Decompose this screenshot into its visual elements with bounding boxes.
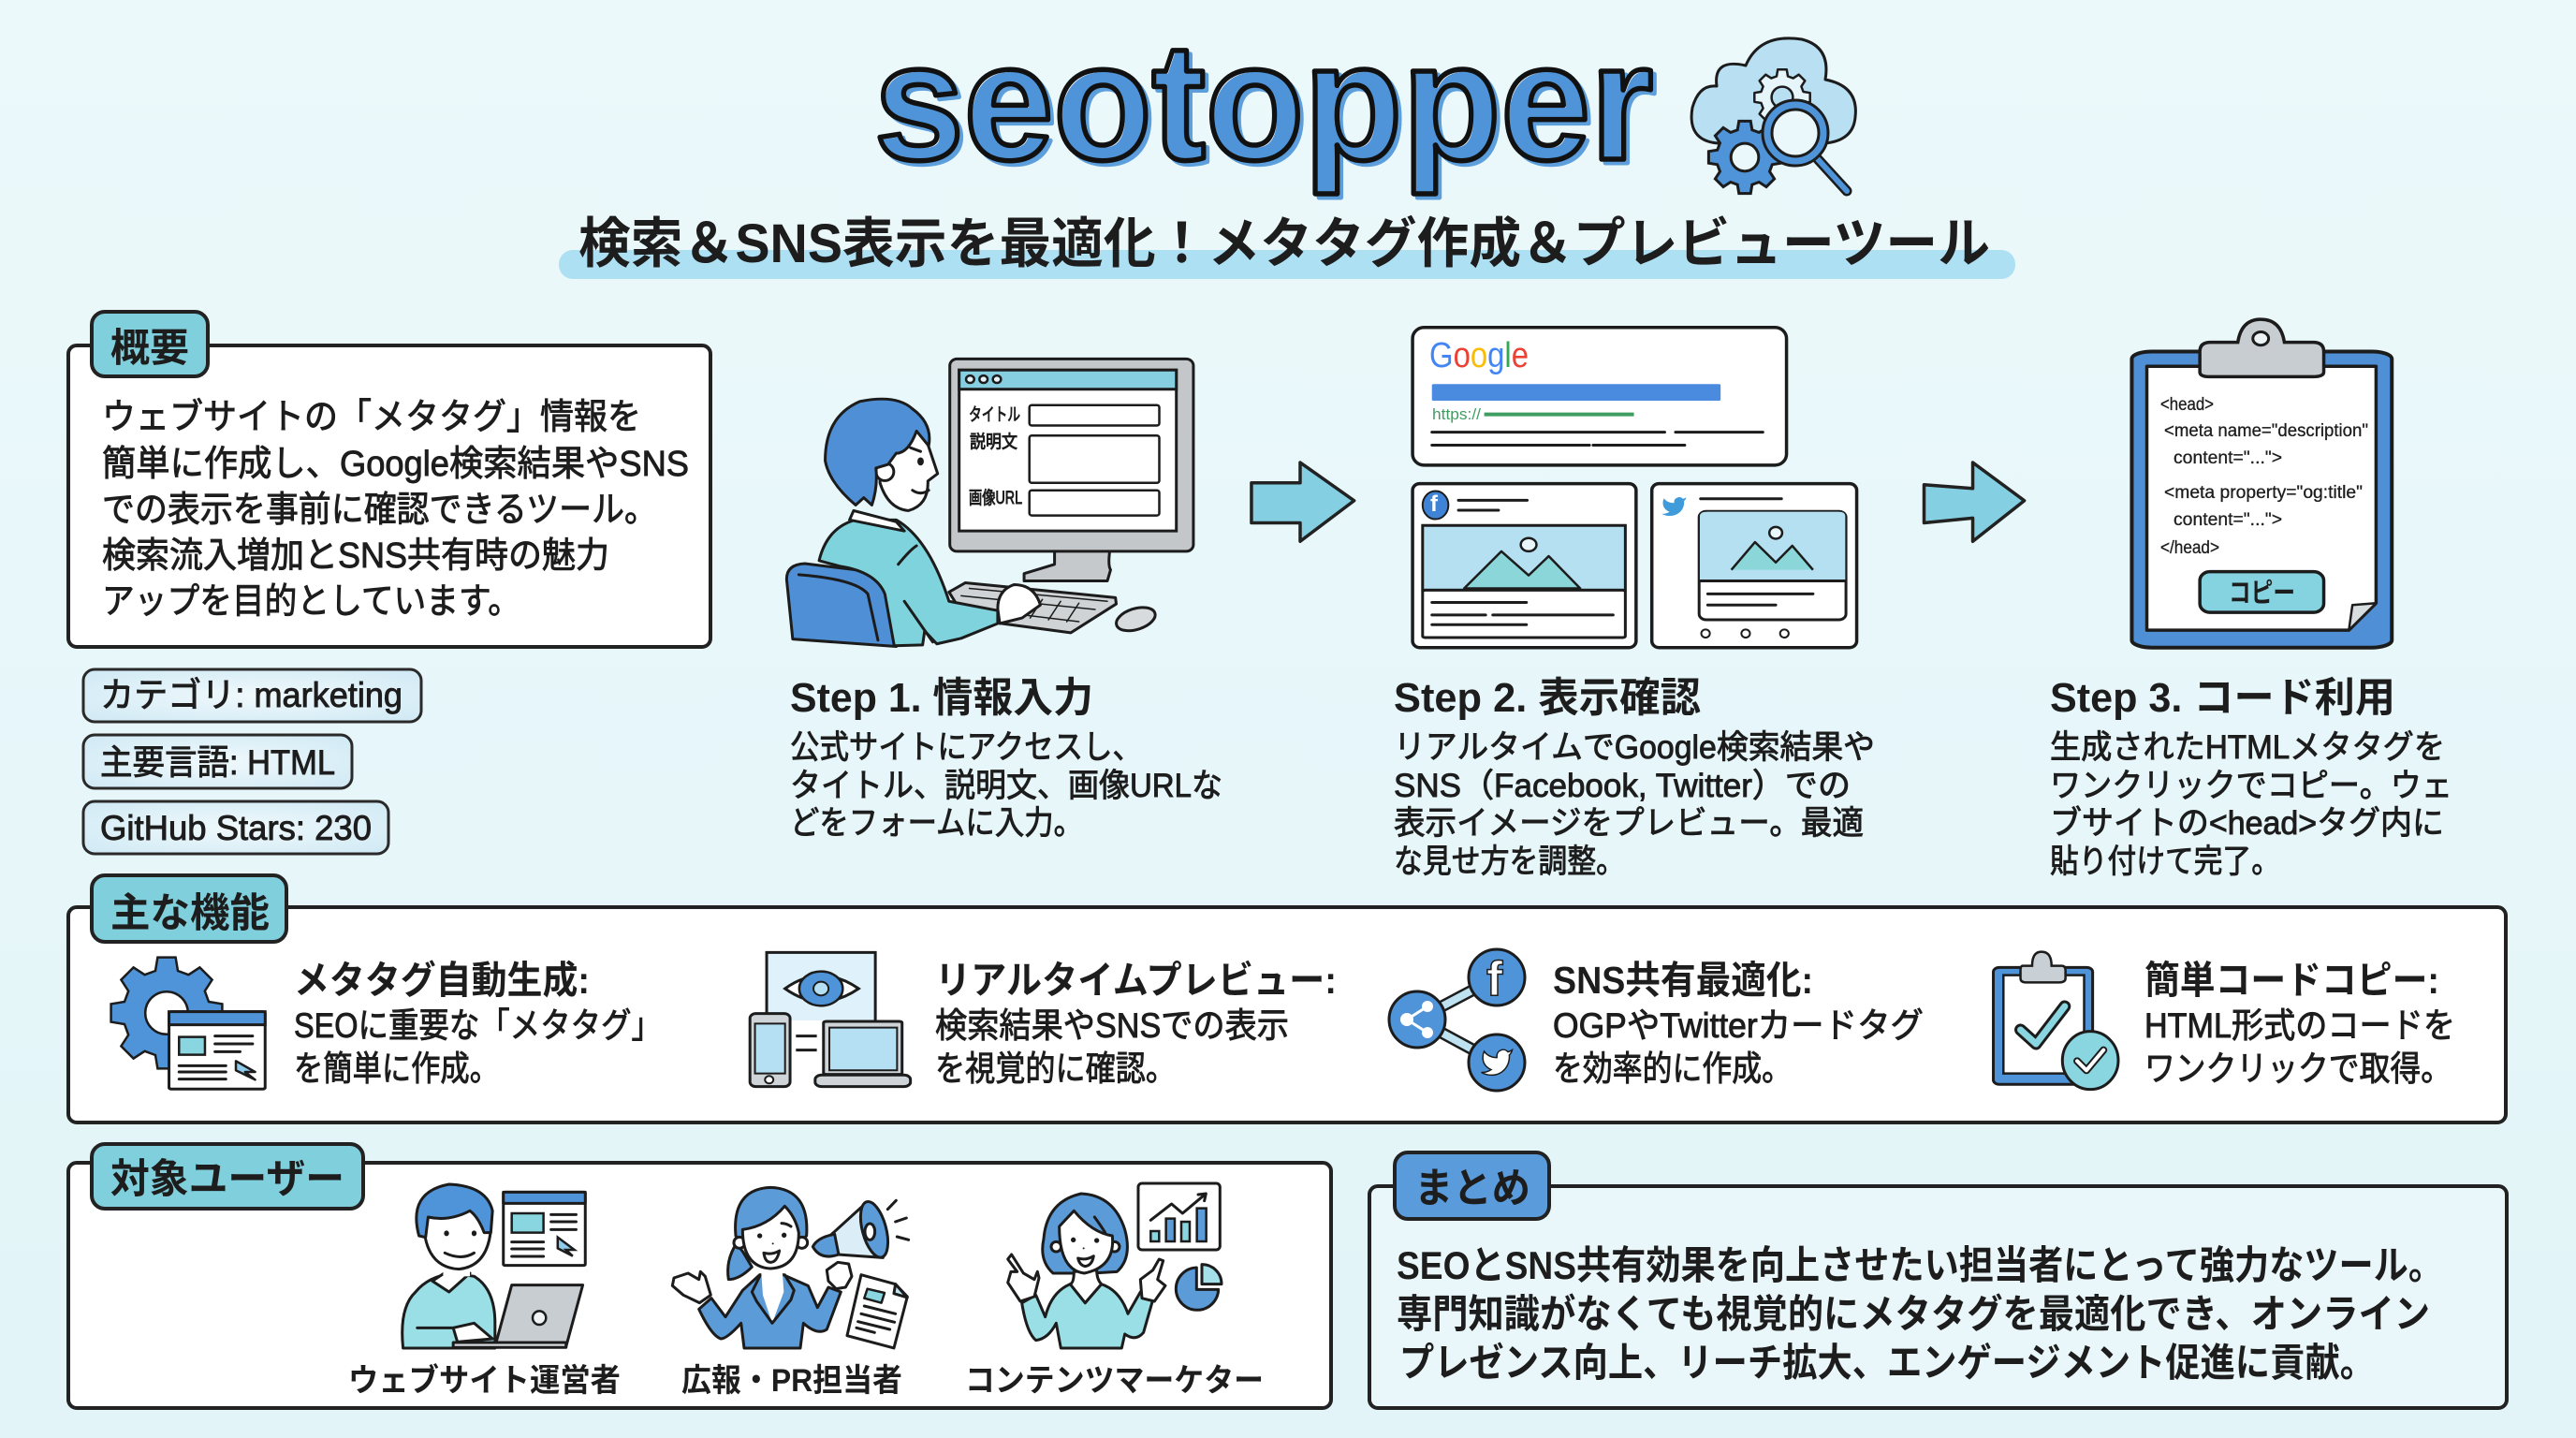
keyboard (949, 583, 1117, 633)
step 2 illustration: search and SNS previews (1412, 328, 1857, 648)
step 3 illustration: clipboard with code (2131, 319, 2392, 648)
user: content marketer: コンテンツマーケター (965, 1363, 1264, 1399)
feature 1 text: メタタグ自動生成: (294, 959, 590, 1002)
feature 4: code copy (1994, 952, 2455, 1090)
hair (1043, 1194, 1127, 1273)
code listing: content="..."> (2174, 510, 2282, 530)
form labels (969, 404, 1022, 508)
feature 1 text: を簡単に作成。 (294, 1049, 499, 1088)
users tab heading: 対象ユーザー (110, 1157, 344, 1202)
feature 3: SNS share optimisation (1389, 949, 1924, 1091)
overview text: での表示を事前に確認できるツール。 (102, 491, 657, 530)
users tab heading (92, 1144, 363, 1209)
copy button label: コピー (2229, 579, 2295, 609)
facebook glyph: f (1430, 492, 1439, 517)
mouse (1113, 603, 1159, 635)
user: content marketer (965, 1183, 1264, 1399)
code listing: content="..."> (2174, 448, 2282, 468)
panel: main features (68, 875, 2506, 1123)
hands (1008, 1255, 1039, 1301)
features tab heading (92, 875, 286, 942)
feature 2 text: 検索結果やSNSでの表示 (935, 1006, 1289, 1045)
head (736, 1187, 807, 1243)
feature 2 text (935, 959, 1337, 1088)
overview text: 検索流入増加とSNS共有時の魅力 (102, 536, 609, 576)
step 2 text: リアルタイムでGoogle検索結果や (1394, 729, 1875, 766)
user: website operator (348, 1184, 621, 1399)
user: PR staff (672, 1187, 909, 1399)
step 3 text: ブサイトの<head>タグ内に (2050, 805, 2444, 842)
overview tab heading (92, 312, 208, 376)
step 2 text: SNS（Facebook, Twitter）での (1394, 768, 1851, 804)
arrow 2 (1925, 462, 2025, 541)
step 2 text: 表示イメージをプレビュー。最適 (1394, 805, 1864, 842)
feature 1 text (294, 959, 662, 1088)
user: PR staff: 広報・PR担当者 (681, 1363, 902, 1399)
chair (786, 564, 896, 647)
chip: language: 主要言語: HTML (100, 743, 335, 782)
feature 3 text: SNS共有最適化: (1553, 959, 1813, 1002)
feature 3 text: OGPやTwitterカードタグ (1553, 1006, 1924, 1045)
features tab heading: 主な機能 (110, 891, 270, 936)
person (819, 399, 1040, 646)
code listing: <head> (2160, 395, 2214, 415)
icon: clipboard with check (1994, 952, 2118, 1090)
step 3 text: ワンクリックでコピー。ウェ (2050, 768, 2452, 804)
summary tab heading: まとめ (1414, 1166, 1530, 1211)
url text: https:// (1432, 405, 1481, 423)
title: seotopper logotype: seotopper (874, 8, 1653, 195)
icon: cloud with gears and magnifier (1691, 38, 1855, 194)
form labels: 画像URL (969, 488, 1022, 508)
icon: share nodes (1389, 949, 1525, 1091)
overview text (102, 398, 689, 622)
feature 2 text: を視覚的に確認。 (935, 1049, 1176, 1088)
step 3 text (2050, 675, 2452, 880)
title: seotopper logotype: seotopper (878, 12, 1657, 198)
overview text: 簡単に作成し、Google検索結果やSNS (102, 445, 689, 484)
overview text: ウェブサイトの「メタタグ」情報を (102, 398, 641, 437)
code listing: <meta name="description" (2164, 421, 2368, 441)
feature 4 text: 簡単コードコピー: (2144, 959, 2439, 1002)
arrow 1 (1251, 462, 1354, 541)
step 1 text (790, 675, 1222, 842)
megaphone (830, 1205, 883, 1257)
summary tab heading (1395, 1152, 1549, 1219)
feature 3 text (1553, 959, 1924, 1088)
form labels: タイトル (969, 404, 1020, 425)
step 3 text: 貼り付けて完了。 (2050, 844, 2280, 880)
step 1 text: タイトル、説明文、画像URLな (790, 768, 1222, 804)
step 3 text: 生成されたHTMLメタタグを (2050, 729, 2445, 766)
summary text (1397, 1243, 2443, 1385)
feature 4 text (2144, 959, 2455, 1088)
chip: github stars: GitHub Stars: 230 (100, 809, 372, 847)
body (1022, 1284, 1153, 1348)
google logo: Google (1429, 336, 1529, 375)
code listing (2160, 395, 2368, 558)
code listing: <meta property="og:title" (2164, 483, 2363, 503)
suit (699, 1275, 841, 1348)
chip: language (83, 735, 352, 788)
facebook card (1412, 484, 1636, 648)
feature 2 text: リアルタイムプレビュー: (935, 959, 1337, 1002)
step 2 text (1394, 675, 1875, 880)
overview text: アップを目的としています。 (102, 582, 520, 622)
feature 3 text: を効率的に作成。 (1553, 1049, 1792, 1088)
feature 1 text: SEOに重要な「メタタグ」 (294, 1006, 662, 1045)
title: seotopper logotype: seotopper (876, 11, 1655, 197)
summary text: プレゼンス向上、リーチ拡大、エンゲージメント促進に貢献。 (1399, 1341, 2375, 1385)
ponytail (728, 1243, 752, 1280)
step 1 text: どをフォームに入力。 (790, 805, 1083, 842)
google result card (1412, 328, 1787, 465)
form labels: 説明文 (970, 432, 1017, 452)
chip: github stars (83, 801, 388, 854)
subtitle with highlight: 検索＆SNS表示を最適化！メタタグ作成＆プレビューツール (578, 213, 1990, 274)
step 3 text: Step 3. コード利用 (2050, 675, 2395, 721)
code listing: </head> (2160, 538, 2219, 558)
twitter card (1652, 484, 1857, 648)
face (1051, 1241, 1061, 1252)
feature 4 text: ワンクリックで取得。 (2144, 1049, 2452, 1088)
step 1 text: Step 1. 情報入力 (790, 675, 1093, 721)
overview tab heading: 概要 (110, 326, 189, 370)
feature 2: realtime preview (750, 952, 1337, 1088)
title: seotopper logotype: seotopper (874, 8, 1653, 195)
chip: category (83, 669, 421, 722)
feature 1: meta tag generation (111, 958, 662, 1089)
chip: category: カテゴリ: marketing (100, 676, 402, 714)
step 2 text: Step 2. 表示確認 (1394, 675, 1701, 721)
icon: gear with window (111, 958, 265, 1089)
document (847, 1275, 907, 1348)
panel: overview (68, 312, 710, 647)
summary text: SEOとSNS共有効果を向上させたい担当者にとって強力なツール。 (1397, 1243, 2443, 1287)
twitter bird (1661, 497, 1687, 516)
summary text: 専門知識がなくても視覚的にメタタグを最適化でき、オンライン (1397, 1292, 2430, 1336)
feature 4 text: HTML形式のコードを (2144, 1006, 2455, 1045)
panel: summary (1369, 1152, 2507, 1408)
pie (1176, 1268, 1219, 1310)
user: website operator: ウェブサイト運営者 (348, 1362, 621, 1399)
monitor (950, 359, 1193, 581)
hands (672, 1271, 710, 1303)
icon: eye and devices (750, 952, 911, 1087)
step 1 text: 公式サイトにアクセスし、 (790, 729, 1142, 766)
step 1 illustration: person at monitor (786, 359, 1193, 647)
chart (1138, 1183, 1220, 1250)
panel: target users (68, 1144, 1331, 1408)
icon: share nodes: f (1486, 952, 1503, 1006)
step 2 text: な見せ方を調整。 (1394, 844, 1625, 880)
